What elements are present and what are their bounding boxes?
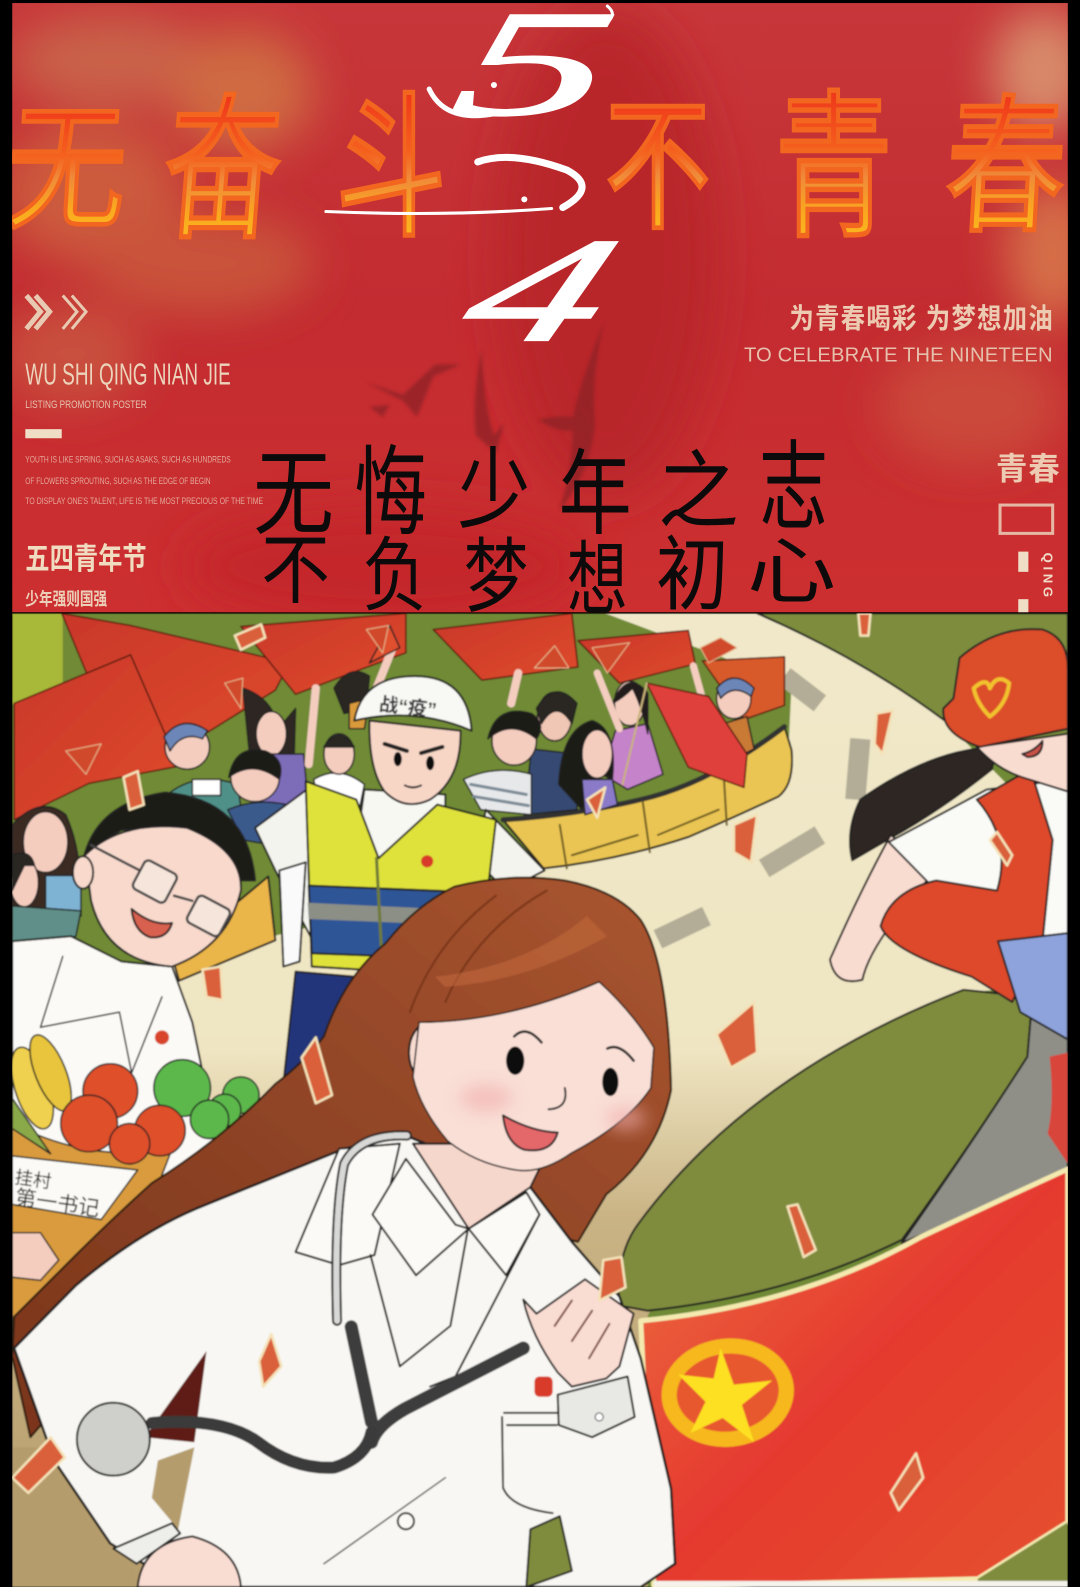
main title: 无奋斗不青春: 奋 — [157, 85, 288, 259]
rolled plans — [279, 862, 306, 967]
basket — [12, 1123, 172, 1336]
left column Chinese heading: 五四青年节 — [25, 541, 147, 575]
runner face — [977, 734, 1068, 791]
grey track — [902, 997, 1068, 1243]
handwritten slogan — [256, 439, 833, 612]
flag emblem — [665, 1340, 791, 1445]
white brush flourish — [326, 6, 612, 213]
left column paragraph: TO DISPLAY ONE'S TALENT, LIFE IS THE MOST PRECIOUS OF THE TIME — [25, 496, 263, 506]
person: child far left — [12, 852, 82, 941]
person: purple dress girl — [597, 673, 663, 789]
runner skirt — [998, 933, 1068, 1039]
right slogan Chinese: 为青春喝彩 为梦想加油 — [790, 302, 1053, 334]
person: small man — [314, 734, 364, 810]
line 2: 不负梦想初心: 想 — [567, 535, 628, 625]
big white numeral 4: 4 — [443, 208, 641, 372]
main title: 无奋斗不青春: 不 — [605, 87, 710, 247]
worker head — [369, 721, 461, 804]
secretary hair — [81, 792, 255, 881]
line 2: 不负梦想初心: 初 — [656, 531, 729, 621]
left column paragraph: YOUTH IS LIKE SPRING, SUCH AS ASAKS, SUCH AS HUNDREDS — [25, 455, 231, 465]
person: boy in navy — [228, 750, 304, 850]
basket label — [12, 1156, 138, 1221]
crowd — [10, 625, 754, 951]
person: striped boy — [464, 711, 541, 815]
doctor face — [413, 982, 654, 1171]
main title: 无奋斗不青春 — [12, 88, 1064, 240]
ponytail — [850, 747, 997, 860]
lower hand — [138, 1536, 241, 1587]
hand on basket — [12, 1233, 59, 1280]
blush — [460, 1084, 512, 1112]
vest reflective bands — [309, 886, 484, 959]
coat button — [398, 1513, 414, 1529]
left column Chinese slogan: 少年强则国强 — [25, 588, 107, 610]
road dashes — [658, 676, 860, 939]
helmet — [354, 676, 472, 731]
left column subheading: LISTING PROMOTION POSTER — [25, 399, 147, 411]
small bar — [25, 429, 62, 438]
person: woman in purple — [243, 688, 316, 810]
runner shirt — [889, 779, 1068, 941]
person: ponytail girl — [334, 625, 400, 729]
worker trousers — [283, 972, 354, 1083]
lower tan gaps — [152, 1447, 194, 1529]
doctor ear — [409, 1022, 451, 1083]
doctor coat — [14, 1136, 675, 1587]
maroon gap between arm and body — [145, 1351, 206, 1442]
dusty orange texture — [0, 10, 1080, 628]
main title: 无奋斗不青春: 斗 — [336, 82, 446, 256]
line 1: 无悔少年之志: 少 — [458, 441, 530, 541]
line 1: 无悔少年之志: 无 — [253, 443, 334, 547]
panel: red banner — [0, 0, 1080, 628]
yellow barrier left — [172, 876, 275, 981]
right small square — [1018, 552, 1028, 572]
tomatoes — [61, 1064, 185, 1164]
basket label: 第一书记 — [13, 1186, 101, 1221]
runner vest — [881, 769, 1053, 1002]
small pennants — [66, 625, 737, 774]
secretary face — [85, 826, 241, 967]
red flags crowd backdrop — [14, 613, 784, 820]
secretary shirt — [12, 936, 228, 1194]
worker shirt — [359, 789, 445, 860]
doctor collar and lapels — [296, 1144, 539, 1387]
coat pocket — [502, 1413, 557, 1513]
basket with vegetables — [3, 1030, 259, 1336]
doctor raised fist — [523, 1279, 634, 1387]
doctor — [12, 878, 675, 1587]
team flag — [641, 1169, 1068, 1587]
line 2: 不负梦想初心: 不 — [261, 529, 330, 614]
mouth — [503, 1115, 558, 1150]
nose — [549, 1088, 565, 1109]
construction worker — [255, 676, 545, 1083]
runner shoes — [1048, 1053, 1068, 1164]
peppers — [154, 1060, 259, 1139]
birds silhouette — [366, 322, 604, 511]
line 2: 不负梦想初心: 负 — [362, 531, 427, 622]
background base — [12, 613, 1068, 1587]
runner girl — [830, 629, 1068, 1039]
person: man in navy — [511, 673, 577, 815]
line 2: 不负梦想初心 — [264, 534, 833, 612]
doctor cuff — [558, 1376, 635, 1437]
left column paragraph — [25, 455, 263, 506]
person: long-haired girl — [559, 721, 617, 815]
corn — [3, 1042, 62, 1134]
line 1: 无悔少年之志: 之 — [658, 444, 739, 540]
village secretary — [12, 792, 255, 1194]
stethoscope — [77, 1135, 523, 1476]
doctor long hair — [12, 878, 671, 1437]
left column paragraph: OF FLOWERS SPROUTING, SUCH AS THE EDGE OF BEGIN — [25, 476, 211, 486]
eyes and brows — [506, 1047, 524, 1075]
line 1: 无悔少年之志: 年 — [559, 442, 632, 546]
main title: 无奋斗不青春: 无 — [2, 94, 131, 246]
basket label: 挂村 — [14, 1167, 52, 1192]
helmet: 战“疫” — [378, 693, 438, 722]
right label 青春: 青春 — [996, 452, 1060, 487]
held red flag — [647, 683, 747, 787]
line 1: 无悔少年之志: 悔 — [354, 439, 427, 548]
line 1: 无悔少年之志: 志 — [759, 434, 828, 542]
panel: illustration — [3, 613, 1068, 1587]
line 2: 不负梦想初心: 梦 — [464, 532, 528, 623]
line 2: 不负梦想初心: 心 — [747, 532, 836, 613]
main title: 无奋斗不青春: 春 — [942, 84, 1070, 251]
runner cap — [943, 629, 1068, 747]
runner arm — [830, 835, 936, 981]
worker arms — [255, 787, 324, 962]
yellow barrier right — [503, 727, 792, 868]
cap heart — [974, 679, 1009, 717]
secretary mouth — [132, 909, 172, 937]
party badge — [534, 1376, 553, 1397]
right outlined box — [1000, 505, 1053, 533]
road — [12, 613, 1012, 1587]
person: worker in blue cap — [162, 723, 243, 825]
person: flag worker — [693, 666, 754, 754]
upper right field — [756, 613, 1068, 737]
worker vest — [306, 781, 496, 977]
main title: 无奋斗不青春: 青 — [775, 81, 892, 257]
right slogan English: TO CELEBRATE THE NINETEEN — [744, 344, 1053, 366]
falling confetti — [12, 613, 1012, 1510]
glasses — [91, 845, 232, 938]
right vertical text: QING — [1041, 553, 1056, 597]
left column heading: WU SHI QING NIAN JIE — [25, 359, 231, 392]
lower field — [619, 990, 1032, 1311]
person: woman far left — [12, 807, 81, 916]
left column chevrons — [26, 296, 86, 329]
line 1: 无悔少年之志 — [256, 439, 824, 534]
doctor neck — [413, 1144, 552, 1229]
